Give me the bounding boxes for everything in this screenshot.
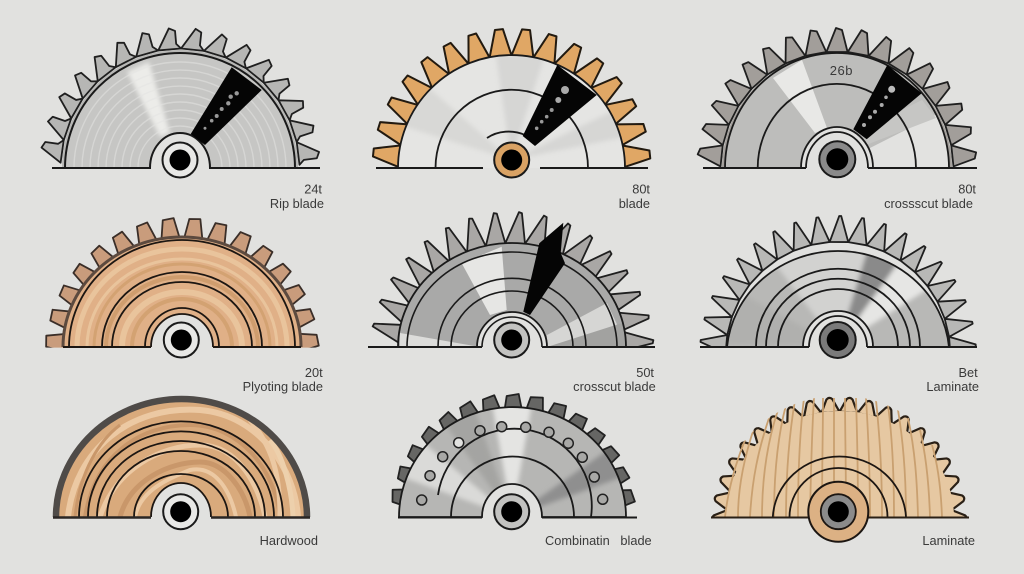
blade: combination blade — [390, 389, 637, 529]
hub — [162, 142, 198, 178]
label: 50t crosscut blade: crosscut blade — [573, 379, 656, 394]
hub — [820, 322, 856, 358]
label: 20t plyoting blade: 20t — [305, 365, 323, 380]
teeth — [712, 397, 967, 528]
blade: laminate wood blade — [711, 397, 969, 542]
baseline — [63, 346, 301, 348]
disc outline — [398, 243, 626, 347]
blade: 80t blade — [372, 29, 651, 178]
rings — [79, 421, 283, 517]
label: 80t crosscut blade: crossscut blade — [884, 196, 973, 211]
disc outline and rings — [398, 55, 625, 168]
disc outline and rings — [725, 53, 949, 168]
wood disc — [59, 402, 304, 516]
label: 20t plyoting blade: Plyoting blade — [243, 379, 323, 394]
baseline — [376, 167, 648, 169]
blade: 80t crosscut blade — [697, 28, 977, 177]
label: Combinatin blade: Combinatin blade — [545, 533, 652, 548]
wood disc — [64, 238, 300, 346]
label: Bet Laminate: Laminate — [926, 379, 979, 394]
etched number: 26b — [830, 63, 853, 78]
rings — [407, 252, 617, 347]
baseline — [398, 516, 637, 518]
black wedge with markings — [191, 67, 262, 145]
black wedge with markings — [853, 65, 922, 139]
hub — [164, 322, 199, 358]
hub — [808, 482, 868, 542]
hub — [163, 494, 198, 529]
baseline — [700, 346, 977, 348]
label: Bet Laminate: Bet — [958, 365, 978, 380]
disc — [726, 54, 948, 167]
blade: 24t rip blade — [40, 28, 320, 178]
hub — [494, 142, 529, 178]
teeth — [40, 28, 320, 165]
tooth band — [722, 53, 952, 168]
label: 80t blade: 80t — [632, 182, 650, 196]
label: Hardwood: Hardwood — [260, 533, 318, 548]
hub — [819, 141, 855, 177]
disc outline — [65, 53, 295, 168]
tooth band — [62, 50, 298, 168]
dark rim — [56, 399, 307, 517]
baseline — [703, 167, 977, 169]
wood grain — [725, 398, 942, 517]
baseline — [711, 516, 969, 518]
disc — [399, 244, 624, 346]
rings — [69, 240, 295, 347]
teeth — [372, 29, 651, 167]
teeth — [697, 28, 977, 166]
teeth — [370, 212, 654, 351]
label: 80t crosscut blade: 80t — [958, 182, 976, 196]
blade: 20t plywood blade — [45, 218, 319, 358]
disc — [728, 252, 948, 346]
black spike — [523, 223, 565, 315]
disc with brushed rings — [66, 54, 294, 167]
rings — [773, 457, 906, 517]
disc — [400, 408, 625, 516]
teeth — [390, 394, 635, 507]
blade: laminate metal blade — [700, 216, 977, 358]
label: 24t rip blade: Rip blade — [270, 196, 324, 211]
disc outline and rings — [727, 251, 949, 347]
hub — [494, 494, 529, 529]
baseline — [368, 346, 655, 348]
blade: hardwood — [50, 395, 315, 529]
label: Laminate: Laminate — [922, 533, 975, 548]
label: 24t rip blade: 24t — [304, 182, 322, 196]
hub — [494, 322, 529, 358]
baseline — [53, 516, 310, 519]
black wedge with markings — [523, 65, 597, 146]
teeth — [45, 218, 319, 353]
label: 50t crosscut blade: 50t — [636, 365, 654, 380]
blade: 50t crosscut blade — [368, 212, 655, 358]
wood disc — [725, 411, 954, 518]
rings — [438, 429, 592, 517]
baseline — [52, 167, 320, 169]
disc — [398, 56, 624, 167]
disc outline — [399, 407, 626, 517]
teeth — [700, 216, 976, 355]
holes — [417, 422, 608, 505]
dark rim — [63, 237, 301, 347]
label: 80t blade: blade — [619, 196, 650, 211]
